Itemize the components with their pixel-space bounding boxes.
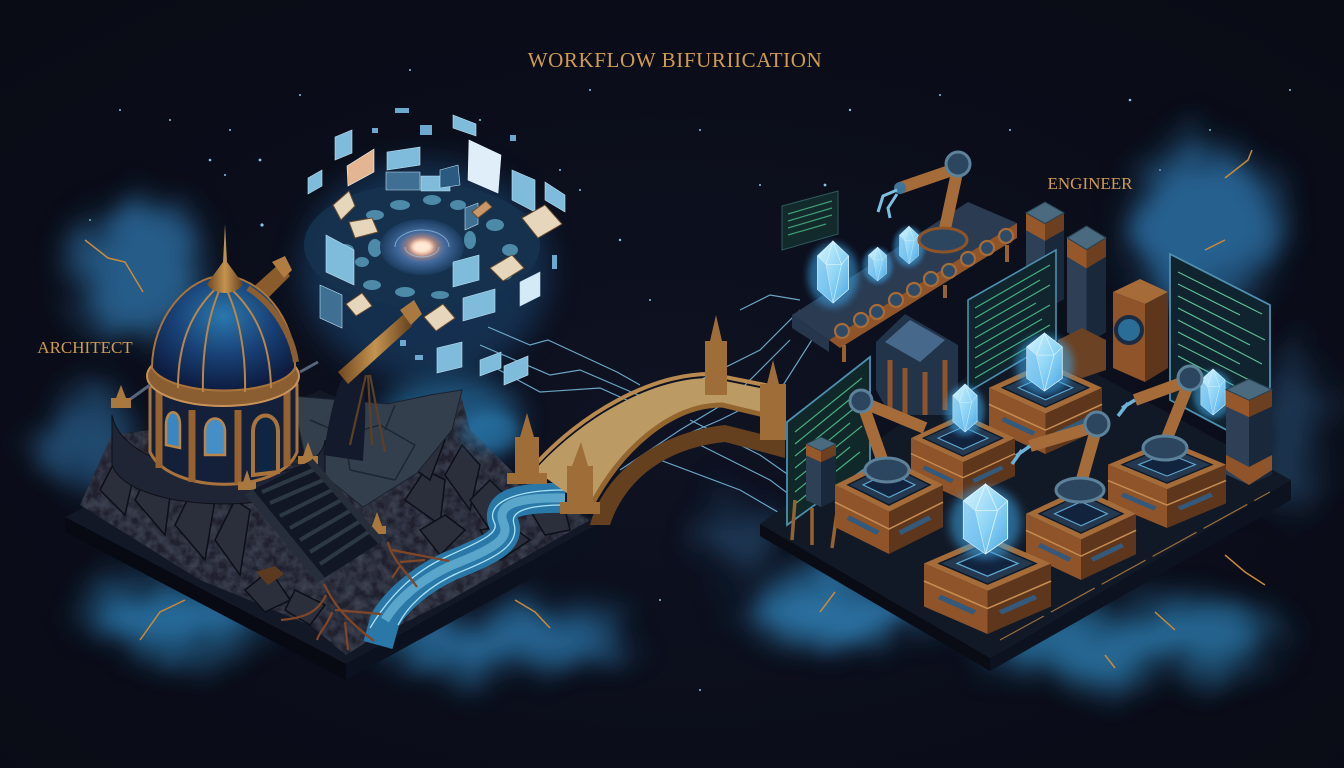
robot arm: top bbox=[878, 152, 970, 252]
label: architect: ARCHITECT bbox=[37, 338, 133, 357]
dome ladder bbox=[248, 288, 296, 362]
swirl band bbox=[304, 183, 540, 307]
observatory bbox=[147, 224, 299, 484]
towers bbox=[1026, 202, 1064, 310]
panel: engineer factory bbox=[760, 152, 1291, 671]
galaxy core bbox=[380, 219, 464, 275]
lightning sparks bbox=[85, 150, 1265, 668]
big screen center bbox=[968, 250, 1056, 392]
robot station: front bbox=[1012, 412, 1136, 580]
swirl fragments bbox=[336, 195, 518, 299]
telescope bbox=[338, 300, 422, 452]
circuit streams to bridge bbox=[480, 295, 815, 525]
document pages bbox=[347, 140, 501, 193]
windows bbox=[166, 412, 180, 448]
glow bbox=[300, 160, 550, 380]
crystal station: front bbox=[924, 484, 1051, 634]
ring bbox=[147, 346, 299, 406]
stairs bbox=[249, 461, 381, 580]
pylons bbox=[507, 315, 786, 514]
stone wall base bbox=[112, 415, 325, 504]
panel: architect island bbox=[65, 224, 601, 680]
title: WORKFLOW BIFURIICATION bbox=[528, 48, 822, 72]
label: engineer: ENGINEER bbox=[1048, 174, 1133, 193]
robot station: left bbox=[835, 390, 943, 554]
drum wall bbox=[150, 385, 297, 484]
conveyor bbox=[792, 202, 1017, 362]
starfield bbox=[89, 69, 1291, 691]
dome bbox=[152, 276, 295, 390]
robot station: right bbox=[1108, 366, 1226, 528]
arch underside bbox=[590, 425, 785, 525]
right screen bbox=[1170, 254, 1270, 453]
bench bbox=[256, 566, 284, 585]
bridge bbox=[507, 315, 786, 525]
small screen bbox=[782, 191, 838, 250]
debris bbox=[372, 108, 557, 360]
platform base bbox=[65, 390, 601, 680]
tower base bbox=[1058, 328, 1106, 378]
finial bbox=[207, 224, 243, 293]
conveyor crystals bbox=[808, 241, 858, 307]
rocky cliff bbox=[80, 392, 590, 655]
right crystal and tower bbox=[1193, 369, 1272, 485]
floating cards bbox=[308, 115, 565, 385]
river bbox=[370, 490, 565, 645]
small left tower bbox=[792, 437, 838, 548]
hooded figure bbox=[323, 368, 365, 461]
terrace paving bbox=[292, 390, 462, 507]
finial posts bbox=[111, 385, 386, 570]
rock glow bbox=[460, 412, 520, 452]
platform base bbox=[760, 335, 1291, 671]
deck bbox=[535, 378, 785, 510]
crystal station: center bbox=[989, 333, 1102, 454]
crystal station: middle bbox=[911, 384, 1015, 500]
panel: knowledge sphere bbox=[300, 108, 565, 385]
glow behind rocks bbox=[380, 375, 520, 465]
open books bbox=[333, 191, 562, 331]
rails bbox=[535, 374, 775, 465]
clock machine bbox=[1113, 279, 1168, 382]
left big screen bbox=[787, 357, 870, 525]
railing bbox=[122, 362, 318, 405]
tree roots bbox=[281, 542, 449, 650]
nebula clouds bbox=[37, 150, 1324, 676]
dome telescope bbox=[250, 256, 292, 304]
middle machine bbox=[876, 314, 958, 415]
